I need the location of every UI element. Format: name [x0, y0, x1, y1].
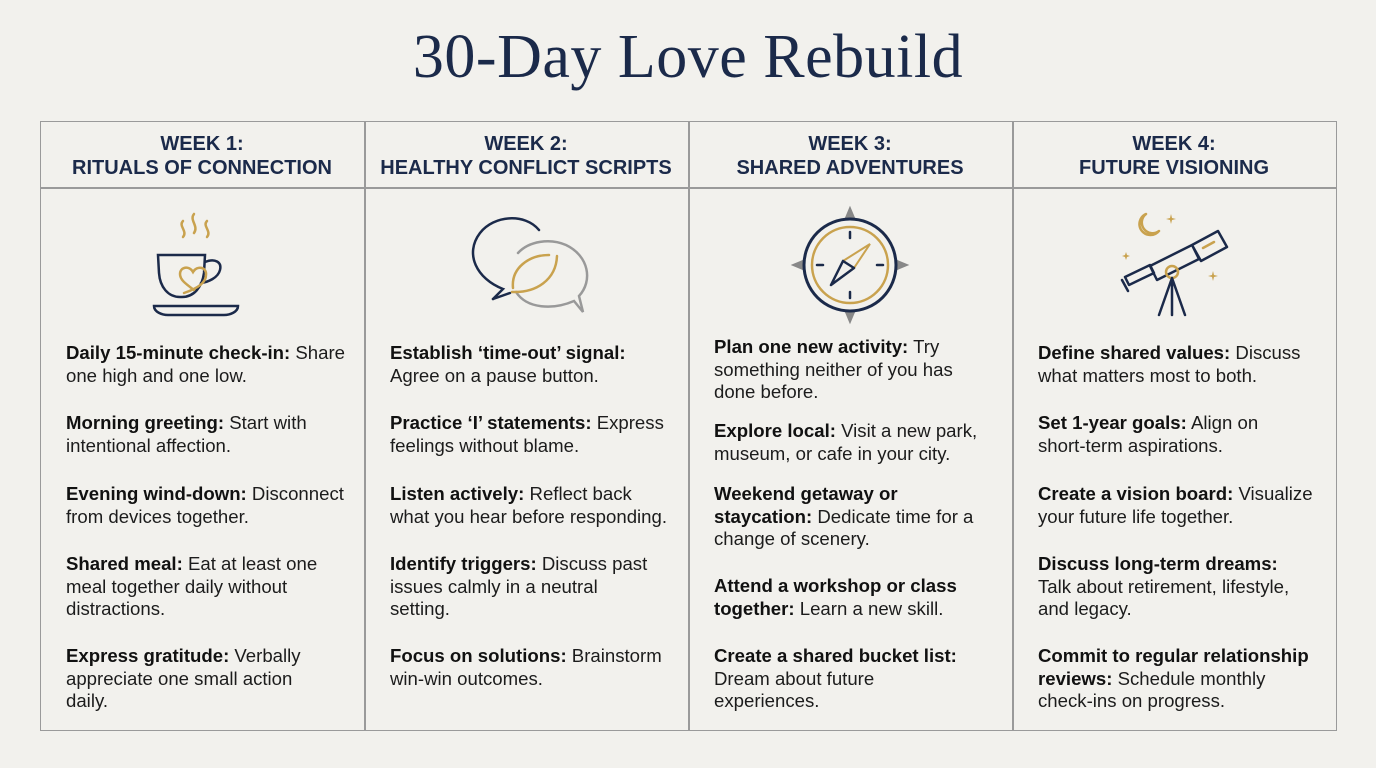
item: Plan one new activity: Try [714, 336, 939, 357]
heading: week 4 [1079, 133, 1269, 179]
item: Attend a workshop or class [714, 575, 957, 596]
item [66, 553, 317, 619]
item [390, 412, 664, 456]
item [1038, 342, 1300, 386]
heading: week 2: WEEK 2: [484, 133, 568, 155]
item: Discuss long-term dreams: [1038, 553, 1278, 574]
item: Evening wind-down: Disconnect [66, 483, 344, 504]
item [390, 645, 662, 688]
item: Focus on solutions: Brainstorm [390, 645, 662, 666]
item: Practice ‘I’ statements: Express [390, 412, 664, 433]
item: one high and one low. [66, 364, 247, 386]
item: Morning greeting: Start with [66, 412, 307, 433]
item: win-win outcomes. [390, 668, 543, 688]
item [66, 645, 301, 711]
heading: week 4: FUTURE VISIONING [1079, 157, 1269, 179]
item: Daily 15-minute check-in: Share [66, 342, 345, 363]
item [714, 645, 957, 711]
item: Shared meal: Eat at least one [66, 553, 317, 574]
item [390, 342, 626, 386]
item: issues calmly in a neutral [390, 576, 598, 596]
item: Talk about retirement, lifestyle, [1038, 576, 1289, 596]
item [1038, 483, 1313, 527]
column 1 items [66, 342, 345, 711]
heading: week 2 [380, 133, 672, 179]
heading: week 4: WEEK 4: [1132, 133, 1216, 155]
heading: week 1 [72, 133, 332, 179]
item: Dream about future [714, 668, 874, 688]
heading: week 1: WEEK 1: [160, 133, 244, 155]
item: Set 1-year goals: Align on [1038, 412, 1258, 433]
column 2 items [390, 342, 667, 688]
item [66, 483, 344, 527]
item: what matters most to both. [1038, 364, 1257, 386]
item: intentional affection. [66, 434, 231, 456]
item: what you hear before responding. [390, 506, 667, 526]
item: Express gratitude: Verbally [66, 645, 301, 666]
item: Agree on a pause button. [390, 364, 599, 386]
item: your future life together. [1038, 506, 1233, 526]
heading: week 3: WEEK 3: [808, 133, 892, 155]
item: meal together daily without [66, 576, 287, 596]
item [714, 420, 977, 464]
icon: coffee cup [152, 212, 240, 316]
item: staycation: Dedicate time for a [714, 506, 973, 526]
table frame [40, 121, 1337, 731]
item [390, 483, 667, 527]
item: check-ins on progress. [1038, 690, 1225, 711]
heading: week 3 [736, 133, 964, 179]
item [1038, 645, 1309, 711]
item: appreciate one small action [66, 668, 292, 688]
item: something neither of you has [714, 358, 953, 380]
item: Explore local: Visit a new park, [714, 420, 977, 441]
item [1038, 553, 1289, 619]
item: short-term aspirations. [1038, 434, 1223, 456]
icon: compass [791, 206, 909, 324]
item: Establish ‘time-out’ signal: [390, 342, 626, 363]
item: Create a shared bucket list: [714, 645, 957, 666]
item: Identify triggers: Discuss past [390, 553, 647, 574]
item [714, 336, 953, 402]
icon: speech bubbles [472, 217, 588, 313]
column 4 items [1038, 342, 1313, 711]
item: Commit to regular relationship [1038, 645, 1309, 666]
item: done before. [714, 381, 818, 402]
item: distractions. [66, 598, 165, 619]
item: Listen actively: Reflect back [390, 483, 632, 504]
heading: week 2: HEALTHY CONFLICT SCRIPTS [380, 157, 672, 179]
item [66, 412, 307, 456]
item [390, 553, 648, 619]
item: experiences. [714, 690, 819, 711]
heading: week 3: SHARED ADVENTURES [736, 157, 964, 179]
item: together: Learn a new skill. [714, 598, 943, 618]
item: from devices together. [66, 506, 249, 526]
heading: week 1: RITUALS OF CONNECTION [72, 157, 332, 179]
icon: telescope [1120, 212, 1228, 316]
item [66, 342, 345, 386]
item: and legacy. [1038, 598, 1132, 619]
item: Weekend getaway or [714, 483, 898, 504]
item: Create a vision board: Visualize [1038, 483, 1313, 504]
item: museum, or cafe in your city. [714, 442, 950, 464]
item: setting. [390, 598, 450, 619]
item: feelings without blame. [390, 434, 579, 456]
item [1038, 412, 1258, 456]
item [714, 483, 974, 549]
item [714, 575, 957, 619]
item: change of scenery. [714, 528, 870, 549]
column 3 items [714, 336, 977, 711]
item: reviews: Schedule monthly [1038, 668, 1265, 688]
title: 30-Day Love Rebuild [413, 23, 963, 91]
item: daily. [66, 690, 108, 711]
item: Define shared values: Discuss [1038, 342, 1300, 363]
